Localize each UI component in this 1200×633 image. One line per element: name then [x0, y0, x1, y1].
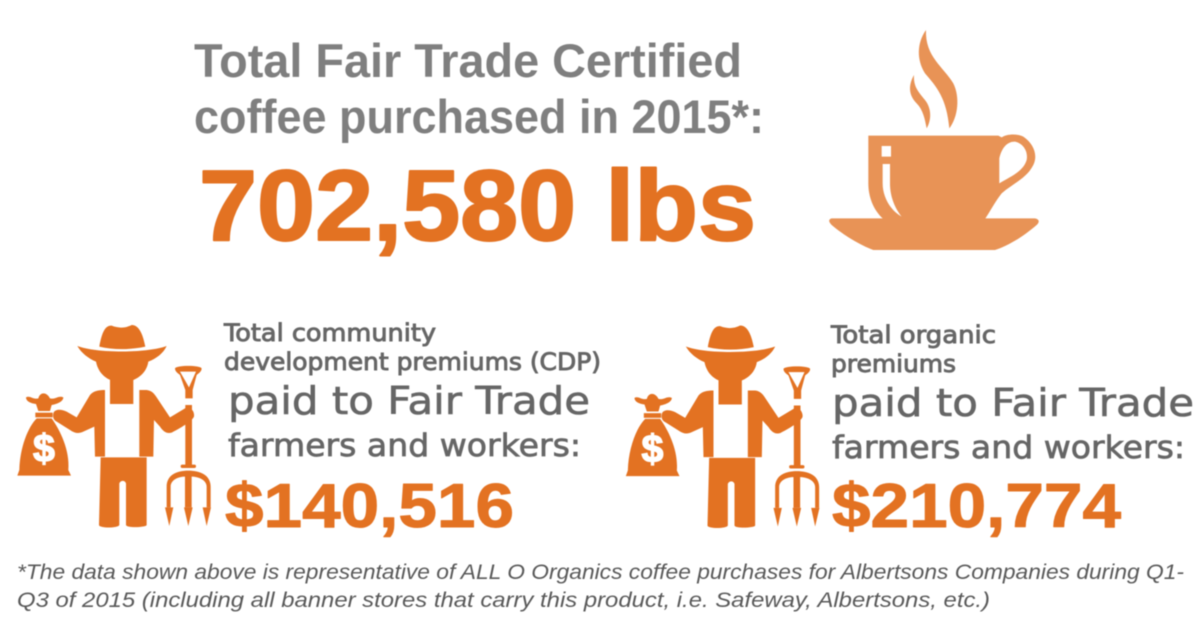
title: Total Fair Trade Certified — [194, 34, 742, 87]
title: coffee purchased in 2015*: — [194, 90, 764, 143]
text block: organic premiums — [830, 321, 1194, 466]
text block: organic premiums: premiums — [831, 350, 956, 378]
title — [194, 34, 764, 143]
footnote: *The data shown above is representative of ALL O Organics coffee purchases for Albertsons Companies during Q1- — [17, 560, 1184, 584]
footnote: Q3 of 2015 (including all banner stores that carry this product, i.e. Safeway, Albertsons, etc.) — [17, 588, 990, 612]
figure: $210,774: $210,774 — [832, 472, 1122, 541]
headline figure: 702,580 lbs: 702,580 lbs — [199, 150, 756, 262]
icon: farmer with money bag and pitchfork (left): $ — [33, 427, 55, 471]
text block: organic premiums: paid to Fair Trade — [832, 381, 1194, 425]
text block: CDP premiums: farmers and workers: — [228, 428, 581, 464]
icon: farmer with money bag and pitchfork (left) — [17, 325, 211, 527]
figure: $140,516: $140,516 — [225, 472, 514, 541]
footnote — [17, 560, 1184, 612]
text block: CDP premiums: development premiums (CDP) — [224, 348, 601, 376]
text block: CDP premiums: Total community — [223, 319, 436, 347]
text block: CDP premiums: paid to Fair Trade — [228, 379, 590, 423]
icon: farmer with money bag and pitchfork (right): $ — [642, 427, 664, 471]
text block: organic premiums: Total organic — [830, 321, 996, 349]
text block: CDP premiums — [223, 319, 601, 464]
icon: coffee cup — [829, 30, 1039, 250]
icon: farmer with money bag and pitchfork (right) — [626, 325, 819, 528]
text block: organic premiums: farmers and workers: — [832, 430, 1185, 466]
